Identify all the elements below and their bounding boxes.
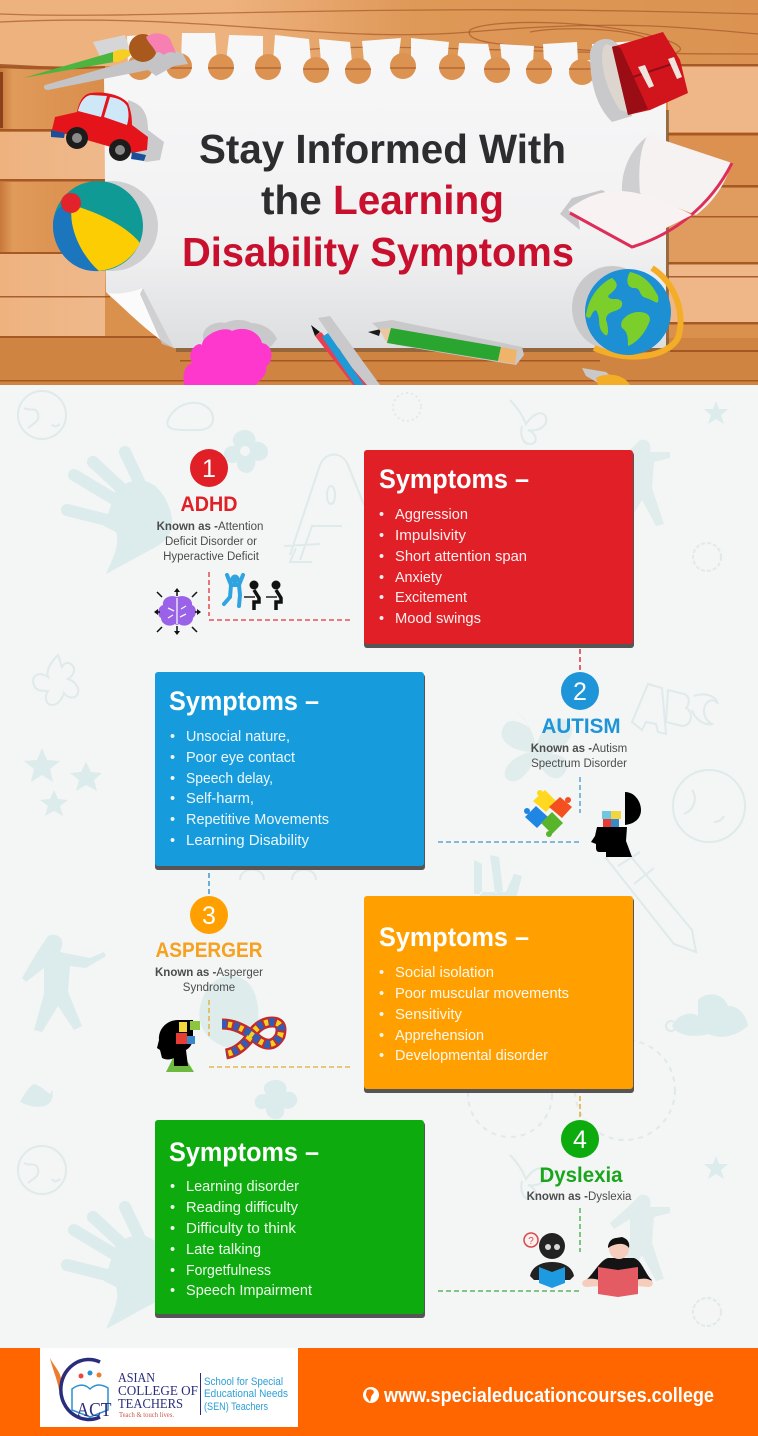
paper tabs bbox=[127, 33, 666, 66]
symptom list: Learning Disability bbox=[186, 833, 310, 849]
symptom list: Social isolation bbox=[395, 965, 494, 981]
symptom list: • bbox=[379, 507, 384, 523]
symptom list: • bbox=[379, 528, 384, 544]
symptom list bbox=[170, 1179, 312, 1299]
title bbox=[182, 126, 574, 275]
icon: open head with puzzle bbox=[591, 792, 641, 857]
icon: puzzle pieces bbox=[524, 790, 572, 837]
logo emblem bbox=[50, 1358, 112, 1421]
number badge 3: 3 bbox=[202, 902, 216, 930]
icon: jumping child with seated pupils bbox=[224, 574, 281, 610]
background doodle pattern bbox=[18, 391, 748, 1329]
symptom list bbox=[170, 729, 329, 849]
panel: Autism symptoms bbox=[155, 672, 425, 870]
icon: globe bbox=[363, 1387, 379, 1403]
symptom list: • bbox=[170, 791, 175, 807]
symptom list: Late talking bbox=[186, 1242, 261, 1258]
ADHD heading: ADHD bbox=[180, 493, 238, 516]
Asperger description: Syndrome bbox=[183, 982, 235, 994]
symptom list: • bbox=[170, 750, 175, 766]
number badge 3 bbox=[190, 896, 228, 934]
logo tagline: School for Special bbox=[204, 1376, 283, 1388]
section: Autism bbox=[438, 649, 641, 857]
logo wordmark: COLLEGE OF bbox=[118, 1384, 198, 1399]
Autism description: Known as -Autism bbox=[531, 743, 627, 755]
heading: Symptoms – bbox=[379, 464, 529, 494]
connector bbox=[579, 1096, 581, 1118]
symptom list: Apprehension bbox=[395, 1028, 484, 1044]
ADHD description: Deficit Disorder or bbox=[165, 536, 257, 548]
symptom list: Learning disorder bbox=[186, 1179, 299, 1195]
logo emblem: ACT bbox=[76, 1399, 112, 1421]
symptom list: Forgetfulness bbox=[186, 1263, 271, 1279]
symptom list: • bbox=[170, 729, 175, 745]
ADHD description: Known as -Attention bbox=[157, 521, 263, 533]
symptom list: • bbox=[379, 570, 384, 586]
number badge 1: 1 bbox=[202, 455, 216, 483]
icon: puzzle ribbon bbox=[222, 1022, 281, 1054]
logo wordmark: Teach & touch lives. bbox=[119, 1411, 174, 1419]
symptom list: • bbox=[170, 1200, 175, 1216]
symptom list: • bbox=[170, 771, 175, 787]
paper curl bbox=[107, 288, 174, 348]
title: Stay Informed With bbox=[199, 126, 566, 172]
icon: reader with question bubble bbox=[524, 1233, 574, 1288]
symptom list: • bbox=[379, 965, 384, 981]
symptom list: • bbox=[379, 590, 384, 606]
symptom list: • bbox=[170, 833, 175, 849]
connector bbox=[438, 1208, 580, 1291]
number badge 2: 2 bbox=[573, 678, 587, 706]
page background bbox=[0, 385, 758, 1348]
connector bbox=[209, 1000, 352, 1067]
symptom list: Poor muscular movements bbox=[395, 986, 569, 1002]
connector bbox=[208, 873, 210, 895]
symptom list: Excitement bbox=[395, 590, 467, 606]
icon: paintbrush bbox=[23, 33, 188, 90]
section: Asperger bbox=[155, 873, 352, 1072]
logo tagline: Educational Needs bbox=[204, 1388, 288, 1400]
logo wordmark: TEACHERS bbox=[118, 1397, 183, 1412]
logo wordmark: ASIAN bbox=[118, 1371, 155, 1386]
symptom list: Unsocial nature, bbox=[186, 729, 290, 745]
symptom list: Difficulty to think bbox=[186, 1221, 297, 1237]
symptom list: Reading difficulty bbox=[186, 1200, 299, 1216]
panel: Dyslexia symptoms bbox=[155, 1120, 425, 1318]
symptom list: Repetitive Movements bbox=[186, 812, 329, 828]
torn paper sheet bbox=[104, 33, 669, 352]
icon: globe bbox=[572, 266, 680, 385]
symptom list: Anxiety bbox=[395, 570, 443, 586]
number badge 4: 4 bbox=[573, 1126, 587, 1154]
panel: ADHD symptoms bbox=[364, 450, 634, 648]
logo card bbox=[40, 1348, 298, 1427]
heading: Symptoms – bbox=[169, 1137, 319, 1167]
icon: child head with puzzle bbox=[157, 1020, 200, 1072]
symptom list: Impulsivity bbox=[395, 528, 467, 544]
icon: red car bbox=[51, 92, 164, 162]
symptom list: • bbox=[379, 1028, 384, 1044]
symptom list: Speech Impairment bbox=[186, 1283, 312, 1299]
number badge 4 bbox=[561, 1120, 599, 1158]
logo tagline bbox=[204, 1376, 288, 1413]
icon: brain with arrows bbox=[154, 588, 201, 635]
ADHD description: Hyperactive Deficit bbox=[163, 551, 260, 563]
icon: beach ball bbox=[53, 181, 158, 271]
symptom list: • bbox=[170, 812, 175, 828]
website url: www.specialeducationcourses.college bbox=[383, 1385, 714, 1407]
symptom list: • bbox=[170, 1283, 175, 1299]
number badge 2 bbox=[561, 672, 599, 710]
symptom list: • bbox=[170, 1179, 175, 1195]
icon: reader with question bubble: ? bbox=[528, 1236, 534, 1247]
symptom list bbox=[379, 507, 527, 627]
wooden header bbox=[0, 0, 758, 385]
connector bbox=[438, 777, 580, 842]
footer bbox=[0, 1348, 758, 1436]
symptom list: Mood swings bbox=[395, 611, 481, 627]
symptom list bbox=[379, 965, 569, 1064]
symptom list: Short attention span bbox=[395, 549, 527, 565]
symptom list: • bbox=[379, 986, 384, 1002]
panel: Asperger symptoms bbox=[364, 896, 634, 1093]
heading: Symptoms – bbox=[379, 922, 529, 952]
icon: open book bbox=[560, 135, 732, 247]
heading: Symptoms – bbox=[169, 686, 319, 716]
Autism description: Spectrum Disorder bbox=[531, 758, 627, 770]
title: the Learning bbox=[261, 177, 504, 223]
symptom list: Developmental disorder bbox=[395, 1048, 548, 1064]
section: Dyslexia bbox=[438, 1096, 653, 1297]
symptom list: Self-harm, bbox=[186, 791, 254, 807]
symptom list: Sensitivity bbox=[395, 1007, 463, 1023]
connector bbox=[579, 649, 581, 670]
symptom list: Aggression bbox=[395, 507, 468, 523]
Asperger description: Known as -Asperger bbox=[155, 967, 263, 979]
symptom list: Speech delay, bbox=[186, 771, 273, 787]
ASPERGER heading: ASPERGER bbox=[156, 939, 262, 962]
number badge 1 bbox=[190, 449, 228, 487]
logo wordmark bbox=[118, 1371, 198, 1419]
Dyslexia heading: Dyslexia bbox=[540, 1164, 623, 1187]
icon: pencils bbox=[311, 316, 524, 385]
section: ADHD bbox=[154, 449, 352, 635]
symptom list: • bbox=[170, 1263, 175, 1279]
icon: pink splat bbox=[183, 320, 277, 385]
logo tagline: (SEN) Teachers bbox=[204, 1401, 268, 1413]
symptom list: • bbox=[379, 1048, 384, 1064]
icon: student reading red book bbox=[582, 1237, 653, 1297]
connector bbox=[209, 572, 352, 620]
symptom list: • bbox=[379, 611, 384, 627]
icon: school bag bbox=[590, 32, 688, 122]
symptom list: Poor eye contact bbox=[186, 750, 295, 766]
symptom list: • bbox=[170, 1242, 175, 1258]
Dyslexia description: Known as -Dyslexia bbox=[527, 1191, 632, 1203]
punched holes bbox=[127, 53, 595, 85]
symptom list: • bbox=[379, 1007, 384, 1023]
symptom list: • bbox=[170, 1221, 175, 1237]
symptom list: • bbox=[379, 549, 384, 565]
title: Disability Symptoms bbox=[182, 229, 574, 275]
AUTISM heading: AUTISM bbox=[542, 715, 620, 738]
